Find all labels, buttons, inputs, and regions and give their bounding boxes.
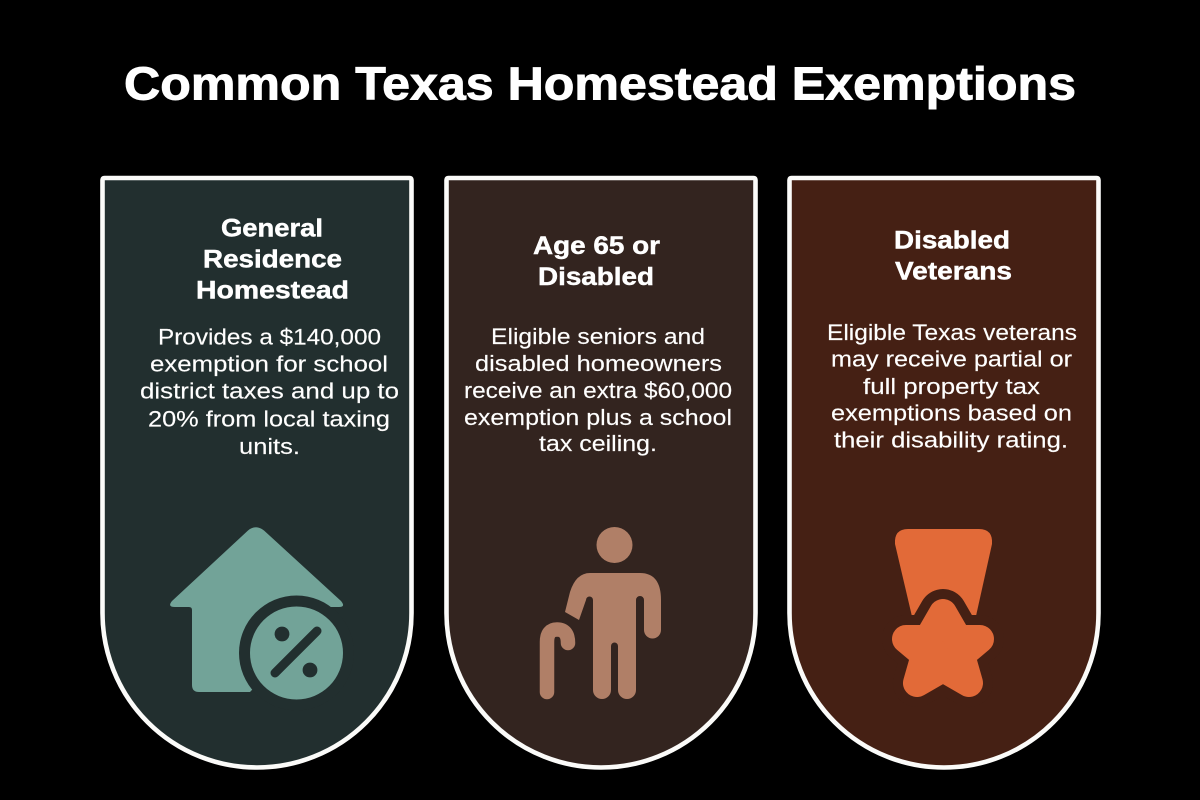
heading: General: [221, 215, 323, 243]
icon: house with percent badge: [170, 527, 354, 710]
description: tax ceiling.: [539, 431, 657, 456]
panel shape: [790, 178, 1098, 768]
description: full property tax: [863, 374, 1040, 399]
description: [827, 320, 1077, 453]
description: exemption plus a school: [464, 405, 732, 430]
heading: [533, 232, 660, 291]
panel: General Residence Homestead: [102, 178, 412, 768]
heading: Homestead: [196, 277, 349, 305]
title: Common Texas Homestead Exemptions: [124, 58, 1076, 110]
description: receive an extra $60,000: [464, 378, 732, 403]
description: their disability rating.: [834, 428, 1068, 453]
description: units.: [239, 434, 300, 459]
heading: Residence: [203, 246, 342, 274]
icon: medal with star: [895, 529, 992, 683]
description: may receive partial or: [831, 347, 1072, 372]
heading: [196, 215, 349, 305]
icon: person with cane: [547, 527, 661, 699]
panel: Disabled Veterans: [790, 178, 1098, 768]
heading: Disabled: [538, 263, 654, 291]
description: exemption for school: [150, 352, 388, 377]
description: exemptions based on: [831, 401, 1072, 426]
panel shape: [446, 178, 756, 768]
heading: Disabled: [894, 226, 1010, 254]
description: [464, 324, 732, 456]
heading: [894, 226, 1012, 285]
description: [140, 325, 399, 459]
description: Provides a $140,000: [158, 325, 381, 350]
description: Eligible seniors and: [491, 324, 705, 349]
description: disabled homeowners: [475, 351, 722, 376]
description: Eligible Texas veterans: [827, 320, 1077, 345]
heading: Veterans: [895, 257, 1012, 285]
description: 20% from local taxing: [148, 407, 390, 432]
panel shape: [102, 178, 412, 768]
description: district taxes and up to: [140, 379, 399, 404]
heading: Age 65 or: [533, 232, 660, 260]
panel: Age 65 or Disabled: [446, 178, 756, 768]
